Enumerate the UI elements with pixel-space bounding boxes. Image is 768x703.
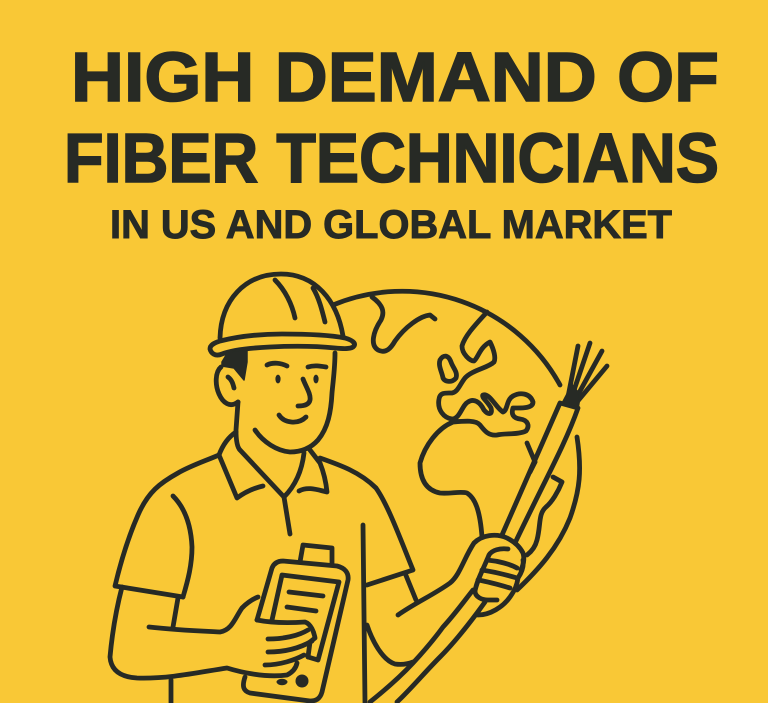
fiber optic cable [370, 343, 607, 702]
handheld device [243, 545, 348, 701]
technician: fingers gripping cable [475, 549, 523, 615]
technician: right arm [367, 535, 524, 664]
technician: head and face [216, 349, 335, 452]
title: HIGH DEMAND OF [71, 38, 719, 116]
title [64, 38, 719, 197]
subtitle: IN US AND GLOBAL MARKET [110, 203, 672, 247]
title: FIBER TECHNICIANS [64, 119, 719, 197]
technician: left arm [110, 587, 297, 678]
illustration: technician with globe and fiber cable [110, 274, 607, 703]
technician: helmet [210, 274, 355, 355]
technician: neck, collar and shirt [115, 402, 416, 703]
globe [333, 291, 580, 590]
technician: hand holding device [257, 620, 315, 665]
